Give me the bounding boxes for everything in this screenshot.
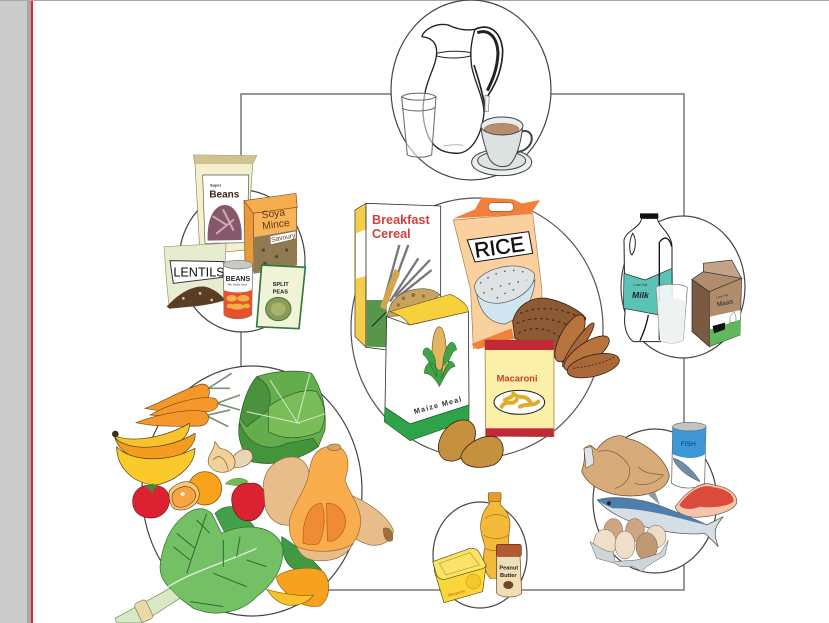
icon: orange (169, 472, 222, 510)
icon: milk bottle: Low Fat (633, 282, 648, 287)
icon: soya mince box: Soya (261, 207, 286, 221)
icon: water jug (422, 24, 503, 153)
icon: lentils bag (164, 243, 226, 309)
icon: soya mince box: Mince (262, 218, 291, 232)
icon: rice bag: RICE (473, 233, 526, 263)
icon: sugar beans bag (193, 155, 257, 254)
icon: baked beans can: With Tomato Sauce (227, 283, 248, 286)
icon: margarine tub: Margarine (447, 588, 467, 598)
circle: dairy (621, 216, 745, 358)
icon: mango (267, 568, 329, 606)
icon: whole fish (597, 492, 723, 547)
icon: tomato (133, 483, 169, 518)
icon: spinach leaf (115, 507, 322, 623)
icon: lentils bag: LENTILS (173, 266, 225, 280)
icon: breakfast cereal box: Breakfast (372, 213, 430, 227)
icon: peanut butter jar: Peanut (499, 565, 518, 571)
icon: sugar beans bag: Beans (209, 189, 240, 200)
icon: split peas bag (257, 265, 305, 329)
group: starches (355, 197, 622, 467)
icon: cabbage (239, 371, 327, 463)
icon: soya mince box: Savoury (271, 232, 297, 244)
icon: milk bottle: Milk (632, 290, 650, 300)
icon: maize meal bag (384, 294, 469, 441)
icon: peanut butter jar (496, 544, 522, 597)
icon: milk carton: Maas (716, 298, 734, 309)
icon: split peas bag: PEAS (273, 290, 288, 296)
icon: tinned fish: FISH (681, 441, 696, 448)
icon: breakfast cereal box: Cereal (372, 227, 411, 241)
icon: maize meal bag: Maize Meal (413, 394, 463, 416)
icon: tea cup and saucer (472, 117, 532, 176)
icon: potatoes (438, 420, 503, 467)
circle: legumes (179, 190, 305, 332)
connecting square frame (241, 94, 684, 590)
icon: baked beans can: BEANS (226, 276, 250, 283)
icon: sugar beans bag: Super (210, 183, 222, 188)
icon: glass of milk (656, 284, 687, 343)
icon: peanut butter jar: Butter (500, 573, 517, 579)
icon: carrots (136, 373, 240, 427)
icon: roast chicken (582, 436, 669, 496)
icon: butternut squash (263, 444, 393, 561)
icon: sliced bread loaf (513, 298, 622, 382)
icon: rice bag (453, 197, 542, 349)
circle: starches (351, 198, 603, 458)
group: vegetables and fruit (112, 371, 393, 623)
circle: fats (433, 502, 527, 608)
icon: bananas (112, 423, 195, 485)
icon: milk carton: Low Fat (716, 293, 728, 300)
icon: milk bottle (623, 213, 673, 342)
icon: macaroni bag (485, 340, 554, 437)
group: protein foods (582, 422, 737, 572)
group: jug, glass and tea (402, 24, 532, 176)
icon: steak (675, 484, 737, 517)
icon: egg tray (590, 519, 668, 572)
icon: breakfast cereal box (355, 203, 441, 350)
circle: protein (593, 429, 717, 573)
circle: vegetables and fruit (142, 366, 362, 616)
group: legumes (164, 155, 305, 329)
icon: soya mince box (244, 193, 297, 273)
icon: cooking oil bottle (481, 493, 510, 578)
icon: baked beans can (223, 260, 253, 319)
icon: apple (225, 478, 265, 521)
icon: glass of milk (402, 93, 436, 157)
icon: split peas bag: SPLIT (273, 282, 289, 288)
icon: macaroni bag: Macaroni (497, 373, 538, 383)
circle: milk and hot drinks (391, 0, 551, 180)
group: low fat dairy (623, 213, 742, 347)
icon: onion and garlic (208, 442, 253, 472)
group: fats and oils (433, 493, 522, 603)
icon: milk carton (692, 260, 742, 347)
icon: tinned fish (672, 422, 706, 488)
